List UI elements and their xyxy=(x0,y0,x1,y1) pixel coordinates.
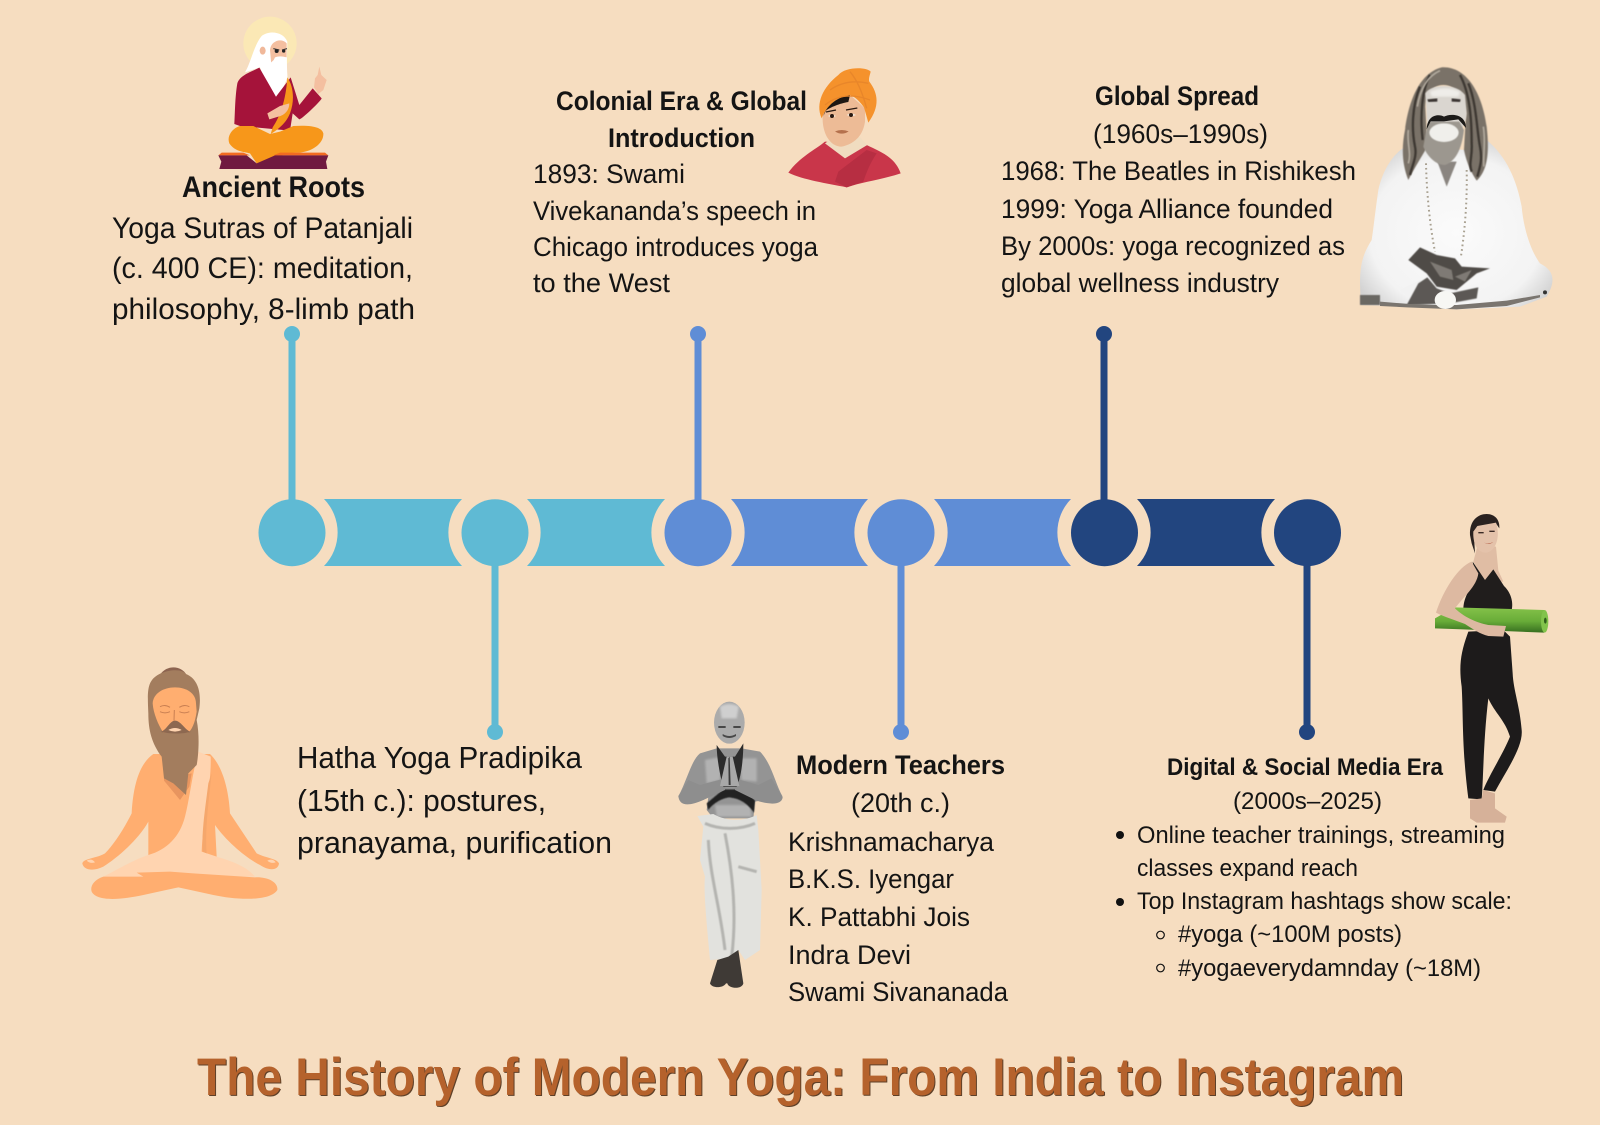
text block: digital and social media era xyxy=(1116,754,1512,982)
text block: global spread: By 2000s: yoga recognized as xyxy=(1001,231,1345,261)
connector: colonial era xyxy=(690,326,706,504)
text block: colonial era: Introduction xyxy=(608,123,755,153)
node 6 xyxy=(1274,499,1341,566)
node 1 xyxy=(258,499,326,566)
text block: colonial era: 1893: Swami xyxy=(533,159,685,189)
text block: digital and social media era: #yoga (~100M posts) xyxy=(1178,921,1402,948)
text block: ancient roots: Yoga Sutras of Patanjali xyxy=(112,212,413,245)
icon: swami vivekananda xyxy=(788,68,901,187)
icon: meditating yogi xyxy=(82,667,279,899)
text block: modern teachers: K. Pattabhi Jois xyxy=(788,902,970,932)
text block: modern teachers: (20th c.) xyxy=(851,788,950,818)
text block: colonial era xyxy=(533,86,819,298)
connector: digital era xyxy=(1299,560,1315,740)
segment 1 xyxy=(324,499,462,566)
text block: digital and social media era: Online teacher trainings, streaming xyxy=(1137,822,1505,849)
node 4 xyxy=(868,499,934,566)
text block: hatha yoga: pranayama, purification xyxy=(297,825,612,860)
text block: global spread: Global Spread xyxy=(1095,81,1259,111)
connector: ancient roots xyxy=(284,326,300,504)
text block: digital and social media era: classes expand reach xyxy=(1137,855,1358,882)
text block: global spread: 1999: Yoga Alliance founded xyxy=(1001,194,1333,224)
segment 3 xyxy=(731,499,868,566)
segment 4 xyxy=(934,499,1071,566)
text block: digital and social media era: Top Instagram hashtags show scale: xyxy=(1137,888,1512,915)
text block: modern teachers: Swami Sivananada xyxy=(788,977,1009,1007)
text block: ancient roots: Ancient Roots xyxy=(182,171,365,204)
text block: digital and social media era: #yogaeverydamnday (~18M) xyxy=(1178,955,1481,982)
text block: global spread: global wellness industry xyxy=(1001,268,1279,298)
connector: global spread xyxy=(1096,326,1112,504)
text block: global spread xyxy=(1001,81,1356,298)
text block: hatha yoga: (15th c.): postures, xyxy=(297,783,546,818)
icon: woman with yoga mat xyxy=(1435,514,1548,823)
text block: ancient roots xyxy=(112,171,415,326)
segment 5 xyxy=(1137,499,1275,566)
node 5 xyxy=(1071,499,1138,566)
icon: maharishi portrait xyxy=(1360,67,1552,309)
segment 2 xyxy=(527,499,665,566)
text block: global spread: 1968: The Beatles in Rishikesh xyxy=(1001,156,1356,186)
text block: modern teachers: Krishnamacharya xyxy=(788,827,995,857)
connector: hatha yoga xyxy=(487,560,503,740)
connector: modern teachers xyxy=(893,560,909,740)
timeline xyxy=(258,326,1341,740)
text block: colonial era: Vivekananda’s speech in xyxy=(533,196,816,226)
text block: hatha yoga xyxy=(297,740,612,860)
node 3 xyxy=(664,499,732,566)
text block: modern teachers: Indra Devi xyxy=(788,940,911,970)
text block: colonial era: Colonial Era & Global xyxy=(556,86,807,116)
icon: standing teacher photo xyxy=(678,702,783,988)
text block: global spread: (1960s–1990s) xyxy=(1093,119,1268,149)
title: The History of Modern Yoga: From India to Instagram xyxy=(197,1048,1404,1107)
text block: digital and social media era: (2000s–2025) xyxy=(1233,788,1382,815)
text block: modern teachers xyxy=(788,750,1009,1007)
text block: modern teachers: Modern Teachers xyxy=(796,750,1005,780)
node 2 xyxy=(462,499,528,566)
text block: ancient roots: (c. 400 CE): meditation, xyxy=(112,252,413,285)
text block: ancient roots: philosophy, 8-limb path xyxy=(112,293,415,326)
text block: modern teachers: B.K.S. Iyengar xyxy=(788,864,954,894)
text block: digital and social media era: Digital & Social Media Era xyxy=(1167,754,1443,781)
text block: hatha yoga: Hatha Yoga Pradipika xyxy=(297,740,583,775)
icon: ancient sage xyxy=(218,17,328,169)
text block: colonial era: to the West xyxy=(533,268,670,298)
text block: colonial era: Chicago introduces yoga xyxy=(533,232,819,262)
